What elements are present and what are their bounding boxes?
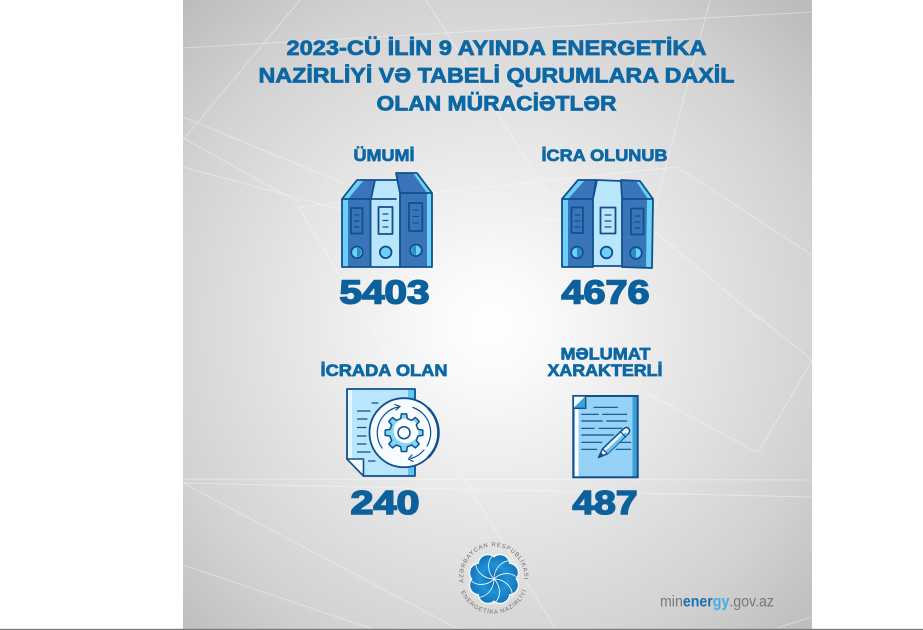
title: OLAN MÜRACİƏTLƏR: [376, 91, 617, 116]
logo: AZƏRBAYCAN RESPUBLİKASI: [459, 542, 528, 583]
label: ümumi: ÜMUMİ: [354, 146, 414, 165]
label: icra olunub: İCRA OLUNUB: [542, 146, 668, 165]
title: 2023-CÜ İLİN 9 AYINDA ENERGETİKA: [286, 35, 706, 60]
title: [258, 35, 734, 116]
title: NAZİRLİYİ VƏ TABELİ QURUMLARA DAXİL: [258, 64, 734, 88]
icon: binders completed: [562, 180, 653, 268]
logo: [459, 542, 528, 614]
label: məlumat xarakterli: [548, 344, 662, 380]
icon: document with pen: [573, 396, 638, 477]
number: 4676: 4676: [562, 274, 650, 312]
label: məlumat xarakterli: MƏLUMAT: [560, 344, 651, 363]
icon: document with gear: [347, 389, 438, 476]
label: icrada olan: İCRADA OLAN: [320, 361, 448, 380]
number: 5403: 5403: [340, 274, 430, 312]
label: məlumat xarakterli: XARAKTERLİ: [548, 361, 662, 380]
number: 240: 240: [350, 485, 420, 522]
bottom rule: [0, 629, 923, 630]
number: 487: 487: [572, 485, 638, 522]
icon: binders total: [342, 173, 432, 267]
background panel: [183, 0, 812, 630]
website: minenergy.gov.az: [660, 594, 774, 611]
logo: ENERGETİKA NAZİRLİYİ: [461, 589, 526, 614]
